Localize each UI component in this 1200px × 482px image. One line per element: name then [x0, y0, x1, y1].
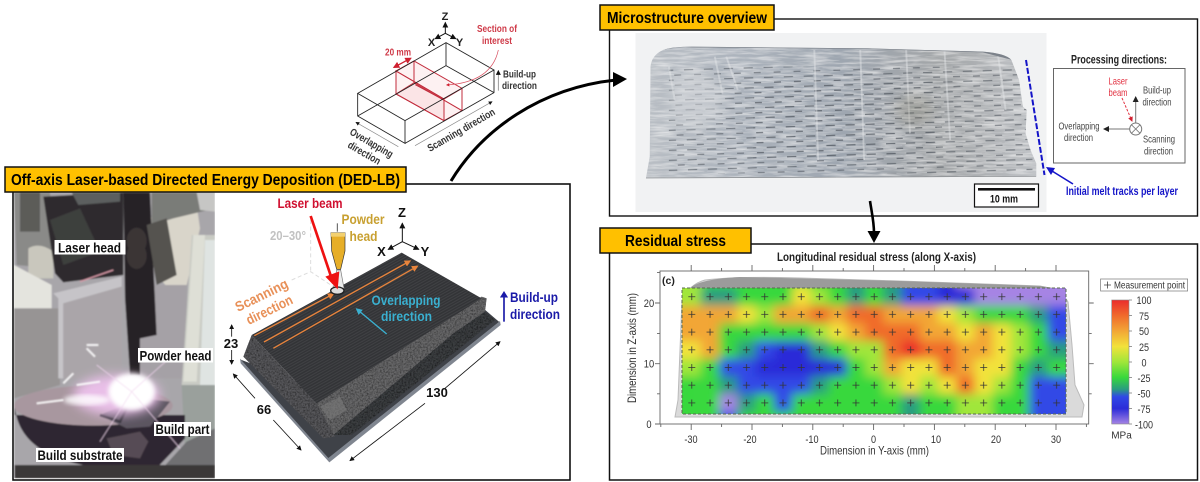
axis letters: Z: [398, 205, 406, 220]
y tick labels: 20: [644, 298, 654, 310]
x tick labels: [684, 434, 1061, 446]
silhouette top: [690, 277, 1062, 290]
label: Build part: Build part: [156, 421, 210, 437]
panel tag (c): (c): [662, 275, 675, 287]
leader: [447, 50, 498, 85]
block outline: [358, 43, 494, 143]
label: section of interest: Section of: [477, 23, 517, 35]
heading: microstructure: [600, 5, 774, 30]
dimensions numbers: 23: [224, 336, 238, 351]
color bar: -75: [1137, 404, 1151, 416]
label: Build-up direction: [510, 289, 560, 322]
overlapping arrow: [357, 309, 387, 334]
angle guide: [292, 220, 333, 287]
y tick labels: [644, 298, 654, 431]
label: section of interest: interest: [482, 35, 512, 47]
inset: processing directions: Laser: [1108, 76, 1128, 88]
color bar: MPa: [1111, 430, 1132, 442]
dimensions numbers: 66: [257, 402, 271, 417]
x tick labels: -20: [743, 434, 757, 446]
initial melt arrow: [1046, 167, 1073, 184]
labels: axes: X: [428, 37, 436, 49]
scale bar: 10 mm: [990, 194, 1018, 206]
dimension arrows: [232, 325, 500, 461]
color bar: 50: [1139, 326, 1149, 338]
panel frame: [610, 19, 1198, 216]
cross-section photo: [645, 46, 1036, 178]
axes: [388, 223, 419, 249]
color bar: -100: [1135, 420, 1153, 432]
chart title: Longitudinal residual stress (along X-axis): [777, 250, 976, 264]
label: overlapping: Overlapping: [348, 126, 395, 161]
heading: microstructure: Microstructure overview: [607, 10, 767, 27]
figure: deposited part: [232, 216, 504, 462]
label: Build-up direction: Build-up: [510, 289, 558, 305]
label: Laser head: Laser head: [58, 239, 121, 255]
label: Powder head (diagram): [342, 211, 385, 244]
heading: DED-LB: Off-axis Laser-based Directed Energy Deposition (DED-LB): [11, 172, 400, 189]
inset: processing directions: direction: [1144, 146, 1173, 158]
panel: residual stress: [610, 244, 1198, 480]
initial melt track line: [1026, 60, 1044, 175]
axis letters: Y: [421, 244, 430, 259]
inset: processing directions: Overlapping: [1058, 120, 1100, 132]
measurement points: [683, 288, 1066, 412]
label: scanning direction: Scanning direction: [426, 106, 497, 155]
x tick labels: 20: [991, 434, 1001, 446]
color bar: 75: [1139, 311, 1149, 323]
inset: processing directions: direction: [1064, 132, 1093, 144]
arrow: microstructure to residual stress: [868, 201, 880, 243]
x tick labels: 30: [1051, 434, 1061, 446]
x tick labels: 0: [871, 434, 876, 446]
x tick labels: 10: [931, 434, 941, 446]
heading: processing directions: Processing directions:: [1071, 52, 1167, 66]
color bar: [1111, 295, 1153, 442]
label: build-up direction: [502, 68, 537, 92]
dimensions numbers: 130: [426, 385, 448, 400]
curved arrow: part to microstructure: [451, 72, 627, 181]
label: Overlapping direction: direction: [381, 308, 432, 324]
color bar: 100: [1136, 295, 1152, 307]
panel frame: [610, 244, 1198, 480]
photo background: [636, 33, 1046, 212]
color bar: -25: [1137, 373, 1151, 385]
laser beam arrow: [311, 216, 339, 289]
y tick labels: 0: [646, 419, 652, 431]
label: build-up direction: Build-up: [503, 68, 536, 80]
label: direction: direction: [346, 139, 383, 168]
heading: residual stress: Residual stress: [625, 233, 726, 250]
red section: [396, 61, 462, 121]
y tick labels: 10: [644, 359, 654, 371]
panel: DED-LB process: [13, 184, 570, 480]
label: Scanning direction: Scanning: [232, 275, 291, 315]
label: Build substrate: Build substrate: [38, 447, 123, 463]
label: section of interest: [477, 23, 517, 47]
inset: processing directions: Scanning: [1143, 134, 1175, 146]
heat map outline: [682, 288, 1066, 414]
scanning arrows: [254, 261, 417, 348]
axis letters: X: [377, 244, 386, 259]
label: Scanning direction: direction: [243, 291, 295, 328]
powder head nozzle: [331, 223, 345, 294]
heading: residual stress: [600, 228, 751, 253]
labels: axes: Y: [456, 37, 464, 49]
diagram: section of interest: [346, 11, 537, 168]
photo: deposition machine: [14, 192, 215, 478]
color bar: 25: [1139, 342, 1149, 354]
20 mm arrow: [394, 58, 411, 67]
label: Build-up direction: direction: [510, 306, 560, 322]
x tick labels: -30: [684, 434, 698, 446]
label: tilt angle: 20–30°: [270, 229, 306, 243]
inset: processing directions: Build-up: [1143, 84, 1171, 96]
color bar: 0: [1141, 358, 1147, 370]
panel frame: [13, 184, 570, 480]
heat map: [682, 288, 1066, 414]
inset: processing directions: direction: [1142, 96, 1172, 108]
y axis label: Dimension in Z-axis (mm): [625, 293, 639, 403]
inset: processing directions: [1054, 68, 1185, 163]
heading: DED-LB: [5, 167, 406, 192]
label: Overlapping direction: [372, 292, 440, 324]
chart frame and ticks: [655, 265, 1094, 430]
build-up arrow: [501, 293, 506, 322]
label: Powder head: Powder head: [140, 347, 212, 363]
scale bar: [974, 184, 1038, 207]
panel: microstructure overview: [610, 19, 1198, 216]
label: Overlapping direction: Overlapping: [372, 292, 440, 308]
sample silhouette: [675, 277, 1084, 417]
labels: axes: Z: [442, 11, 449, 23]
direction arrows: [497, 71, 500, 91]
color bar: -50: [1137, 389, 1151, 401]
label: build-up direction: direction: [502, 80, 537, 92]
label: Laser beam: Laser beam: [278, 195, 342, 211]
axes: [435, 23, 456, 39]
x axis label: Dimension in Y-axis (mm): [820, 444, 929, 458]
x tick labels: -10: [805, 434, 819, 446]
inset: processing directions: beam: [1108, 87, 1128, 99]
label: Powder head (diagram): Powder: [342, 211, 385, 227]
label: Powder head (diagram): head: [350, 228, 378, 244]
label: 20 mm: 20 mm: [385, 48, 411, 58]
